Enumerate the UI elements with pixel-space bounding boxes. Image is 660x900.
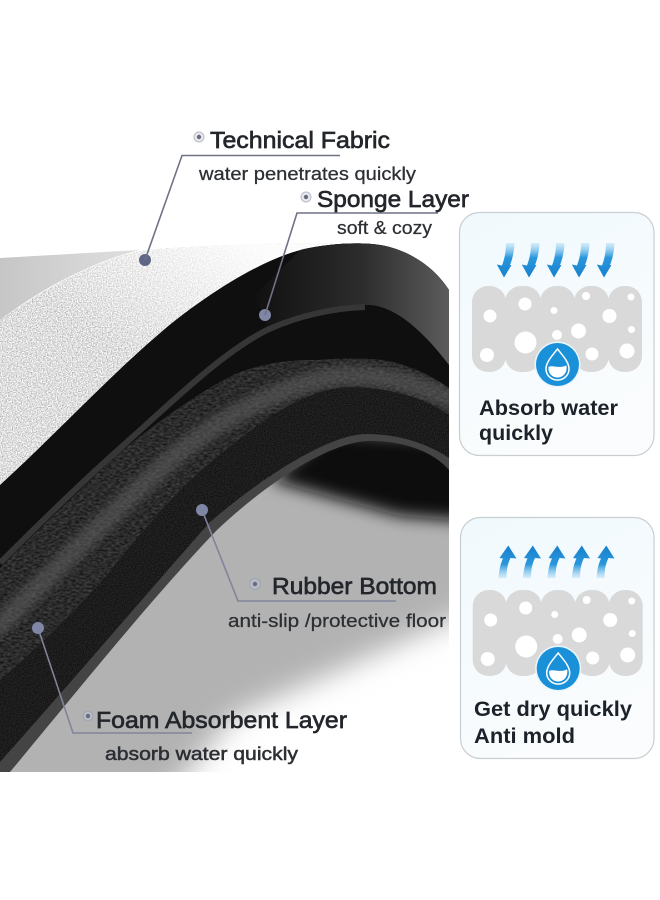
callout: foam absorbent layer: Foam Absorbent Layer [96,707,347,733]
panel: absorb water quickly [460,212,654,456]
back fold of the fabric [0,250,140,320]
panel: absorb water quickly: quickly [479,421,553,445]
callout: technical fabric [139,127,416,266]
foam absorbent layer [0,350,455,690]
panel: get dry quickly: Anti mold [474,724,575,748]
icon: up arrows [498,546,614,578]
icon: porous foam with water drop [473,590,643,692]
callout: foam absorbent layer [32,622,347,764]
callout: sponge layer [259,186,469,321]
panel: layered mat photo [0,243,449,772]
callout: rubber bottom [196,504,446,631]
mat edge rim [0,243,449,772]
sponge layer [0,243,449,568]
rubber bottom layer [0,380,449,772]
panel: get dry quickly [460,518,654,758]
icon: porous foam with water drop [472,286,642,388]
callout: sponge layer: soft & cozy [337,218,432,238]
technical fabric layer [0,240,345,490]
callout: foam absorbent layer: absorb water quickly [105,744,298,764]
text: get dry quickly: Get dry quickly [474,697,632,721]
callout: rubber bottom: anti-slip /protective floor [228,611,446,631]
callout: rubber bottom: Rubber Bottom [272,573,437,599]
callout: sponge layer: Sponge Layer [317,186,469,212]
icon: down arrows [497,243,614,278]
text: absorb water quickly: Absorb water [479,396,619,420]
callout: technical fabric: water penetrates quickly [198,164,416,184]
callout: technical fabric: Technical Fabric [210,127,390,153]
floor shadow under the arch [10,440,449,772]
